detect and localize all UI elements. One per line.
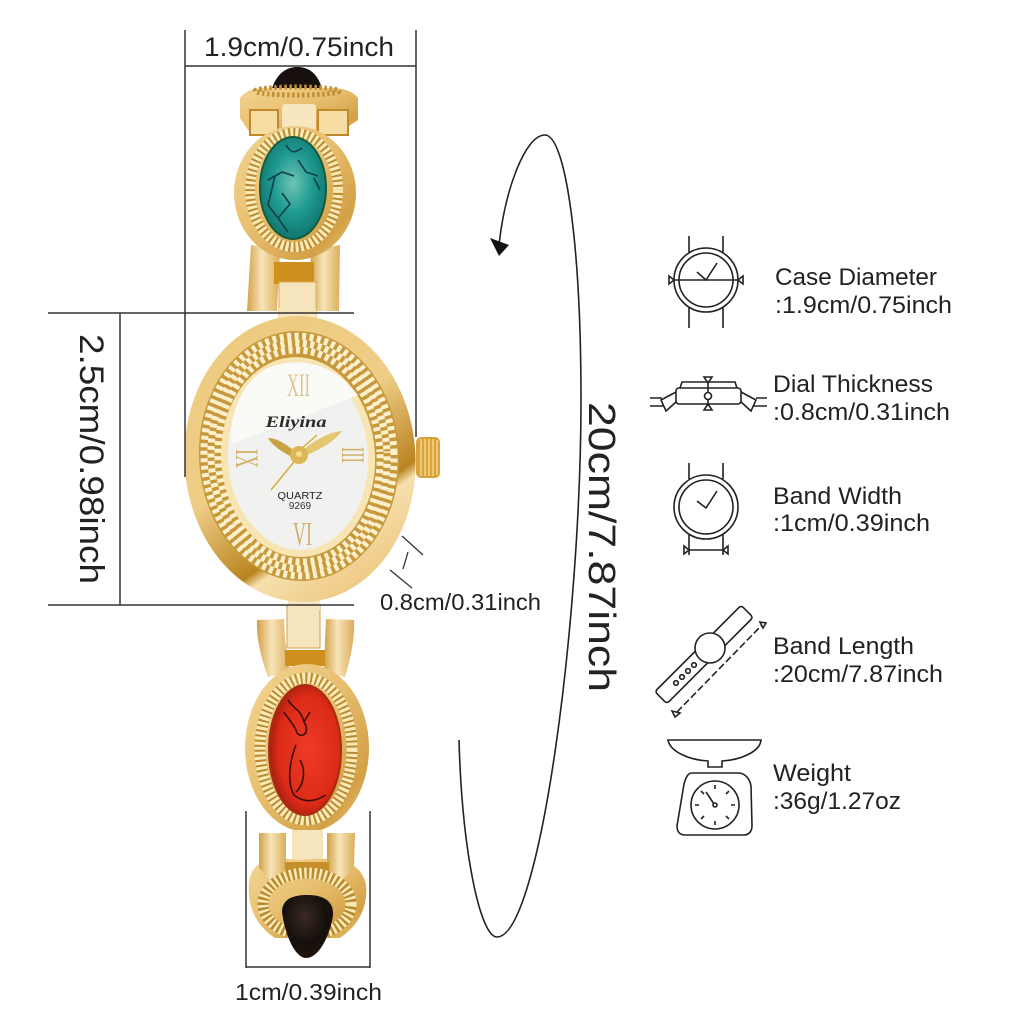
bracelet: upper links with turquoise stone [234,67,358,318]
dimension: case height left: 2.5cm/0.98inch [72,334,110,584]
spec: band length [773,633,943,688]
dial: VI [293,516,312,553]
icon: case diameter [669,236,743,328]
links behind case [279,308,316,324]
crown [416,437,440,478]
black cabochon top [271,67,323,92]
spec: band width [773,483,930,537]
dial [223,360,373,554]
spec: dial thickness: :0.8cm/0.31inch [773,399,950,426]
spec: case diameter: :1.9cm/0.75inch [775,292,952,319]
dimension: case diameter top: 1.9cm/0.75inch [204,32,394,62]
band length label: 20cm/7.87inch [580,402,622,692]
spec: weight: :36g/1.27oz [773,788,901,815]
dimension: case height left [48,313,354,605]
spec: dial thickness: Dial Thickness [773,371,933,398]
dimension: dial thickness: 0.8cm/0.31inch [380,589,541,615]
spec: band width: :1cm/0.39inch [773,510,930,537]
numerals: XII [287,368,310,404]
red stone [269,685,341,815]
top link [287,606,320,648]
top connector [240,88,358,136]
lower legs [247,245,280,311]
model text: QUARTZ [278,491,322,502]
brand: Eliyina [264,414,326,431]
spec: dial thickness [773,371,950,426]
spec: band width: Band Width [773,483,902,510]
hands [271,457,298,490]
icon: band width [674,463,738,555]
oval setting [234,126,356,260]
outer bezel [177,310,423,608]
spec: weight [773,760,901,815]
bracelet: lower links with red stone [245,606,369,958]
icon: band length [655,605,766,717]
icon: dial thickness [650,377,767,411]
black cabochon bottom [282,895,333,958]
bottom link [292,830,323,872]
spec: weight: Weight [773,760,851,787]
spec: band length: :20cm/7.87inch [773,661,943,688]
lugs [257,619,290,677]
arrow: band length loop [459,135,581,937]
dimension: band width bottom [235,811,382,1005]
spec: case diameter [775,264,952,319]
spec: band length: Band Length [773,633,914,660]
oval setting [245,664,369,832]
spec: case diameter: Case Diameter [775,264,937,291]
dimension: case diameter top [185,30,416,477]
watch case [177,308,440,610]
dimension: band width bottom: 1cm/0.39inch [235,979,382,1005]
rope ring [193,326,405,586]
dial: III [334,447,370,463]
dial: IX [228,449,264,468]
turquoise stone [260,137,326,239]
dimension: dial thickness [380,536,541,615]
icon: weight scale [668,740,761,835]
dial: 9269 [289,501,312,512]
